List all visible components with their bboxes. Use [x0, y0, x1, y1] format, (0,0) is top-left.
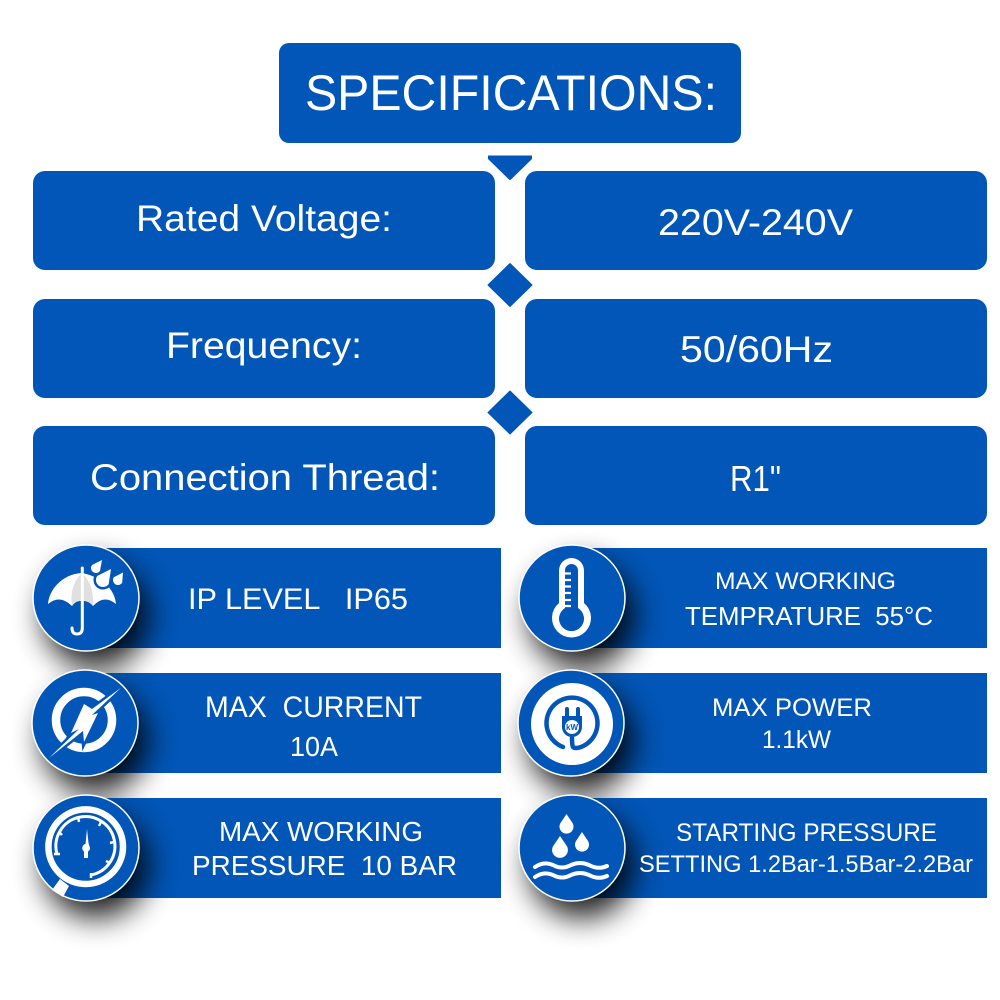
panel: starting pressure setting — [519, 795, 987, 918]
panel: max power: 1.1kW — [762, 726, 831, 754]
panel: frequency label: Frequency: — [166, 325, 362, 366]
panel: max working temperature: TEMPRATURE 55°C — [685, 601, 933, 631]
panel: frequency value: 50/60Hz — [680, 329, 833, 370]
icon: thermometer — [552, 558, 591, 637]
panel: starting pressure setting: STARTING PRESSURE — [676, 819, 937, 847]
panel: max power — [518, 670, 987, 793]
panel: max working pressure: PRESSURE 10 BAR — [192, 850, 457, 881]
panel: connection thread label — [33, 426, 495, 525]
icon: diamond connector two — [488, 391, 532, 434]
panel: rated voltage value — [525, 171, 987, 270]
panel: rated voltage label — [33, 171, 495, 270]
title — [279, 43, 741, 143]
panel: max current — [32, 670, 501, 793]
panel: max power: MAX POWER — [712, 694, 872, 722]
panel: rated voltage label: Rated Voltage: — [136, 198, 392, 239]
panel: max current: MAX CURRENT — [205, 691, 422, 724]
panel: IP level: IP LEVEL IP65 — [188, 583, 408, 616]
panel: frequency label — [33, 299, 495, 398]
icon: umbrella with rain — [48, 560, 123, 634]
panel: max working temperature: MAX WORKING — [715, 568, 896, 595]
panel: max working pressure: MAX WORKING — [219, 816, 423, 847]
panel: max working temperature — [519, 545, 987, 668]
panel: connection thread label: Connection Thread: — [90, 457, 440, 498]
icon: lightning bolt in ring — [49, 688, 121, 758]
panel: starting pressure setting: SETTING 1.2Bar-1.5Bar-2.2Bar — [639, 851, 973, 878]
panel: rated voltage value: 220V-240V — [658, 202, 853, 243]
icon: diamond connector one — [488, 264, 532, 306]
title: SPECIFICATIONS: — [305, 65, 717, 121]
panel: IP level — [33, 545, 501, 668]
panel: max working pressure — [33, 795, 501, 918]
icon: pressure gauge — [48, 809, 123, 897]
icon: power plug — [531, 683, 613, 765]
panel: connection thread value — [525, 426, 987, 525]
arrow: pointer below title — [488, 156, 532, 180]
panel: frequency value — [525, 299, 987, 398]
panel: max current: 10A — [290, 731, 338, 762]
icon: water drops and waves — [535, 814, 607, 878]
panel: connection thread value: R1" — [730, 458, 781, 499]
icon: power plug: kW — [566, 723, 578, 732]
